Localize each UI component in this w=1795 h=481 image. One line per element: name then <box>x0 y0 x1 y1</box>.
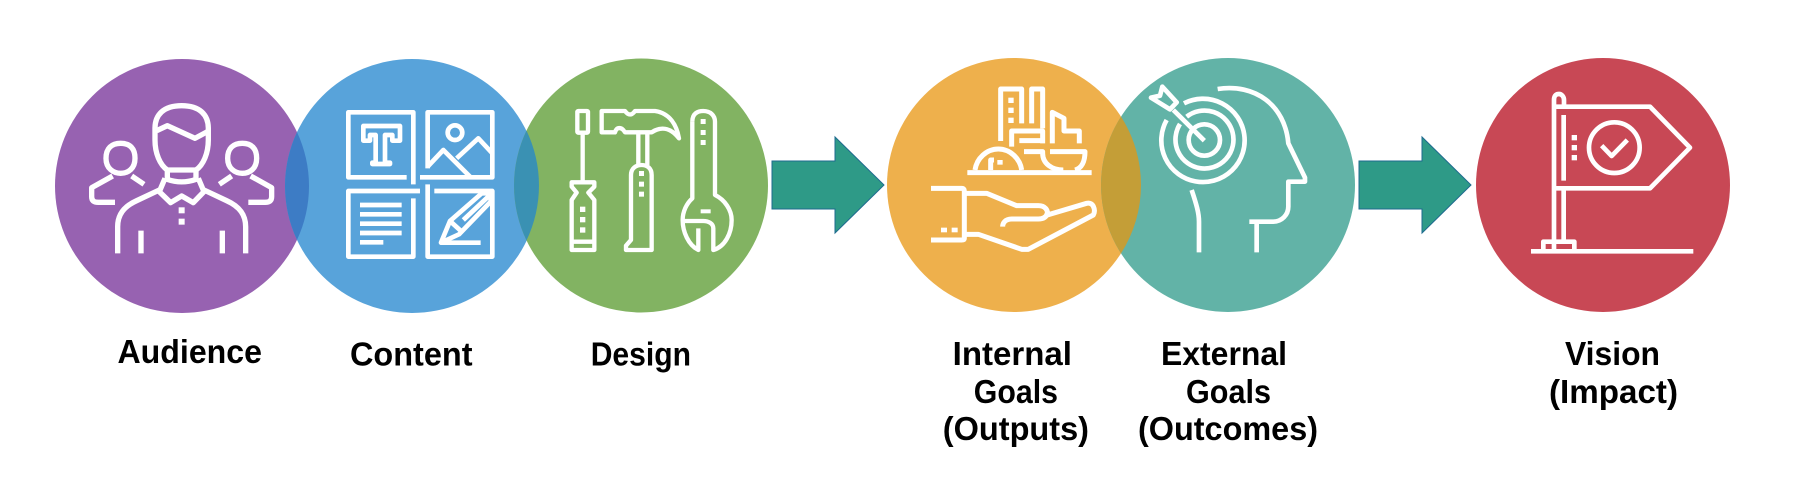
circle: Content <box>285 59 539 313</box>
overlap: Internal and External Goals <box>1101 117 1141 253</box>
arrow: to Internal Goals <box>772 137 884 233</box>
icon: hand holding city <box>931 89 1094 249</box>
circle: External Goals <box>1101 58 1355 312</box>
label: External Goals (Outcomes): (Outcomes) <box>1138 410 1318 447</box>
label: Vision (Impact): (Impact) <box>1549 373 1678 410</box>
step: Design <box>514 58 768 372</box>
circle: Internal Goals <box>887 58 1141 312</box>
circle: Audience <box>55 59 309 313</box>
arrow: to Vision <box>1359 137 1471 233</box>
overlap: Audience and Content <box>285 132 309 240</box>
label: Design: Design <box>591 336 691 372</box>
label: Vision (Impact) <box>1549 335 1678 410</box>
step: Internal Goals <box>887 58 1141 447</box>
label: External Goals (Outcomes): Goals <box>1186 373 1271 410</box>
circle: Vision <box>1476 58 1730 312</box>
step: Content <box>285 59 539 372</box>
overlap: Content and Design <box>514 131 539 240</box>
label: External Goals (Outcomes): External <box>1161 335 1287 372</box>
label: Vision (Impact): Vision <box>1565 335 1660 372</box>
label: Internal Goals (Outputs): Goals <box>974 373 1058 410</box>
label: Content: Content <box>350 336 473 372</box>
icon: content tiles <box>348 112 492 257</box>
label: External Goals (Outcomes) <box>1138 335 1318 447</box>
step: External Goals <box>1101 58 1355 447</box>
label: Internal Goals (Outputs): Internal <box>953 335 1072 372</box>
step: Audience <box>55 59 309 370</box>
icon: tools <box>572 111 732 250</box>
label: Internal Goals (Outputs) <box>943 335 1089 447</box>
label: Internal Goals (Outputs): (Outputs) <box>943 410 1089 447</box>
icon: head with target <box>1151 87 1305 252</box>
icon: group of people <box>92 106 272 253</box>
label: Audience: Audience <box>118 333 262 370</box>
step: Vision <box>1476 58 1730 410</box>
icon: flag with check mark <box>1531 94 1693 251</box>
circle: Design <box>514 58 768 312</box>
